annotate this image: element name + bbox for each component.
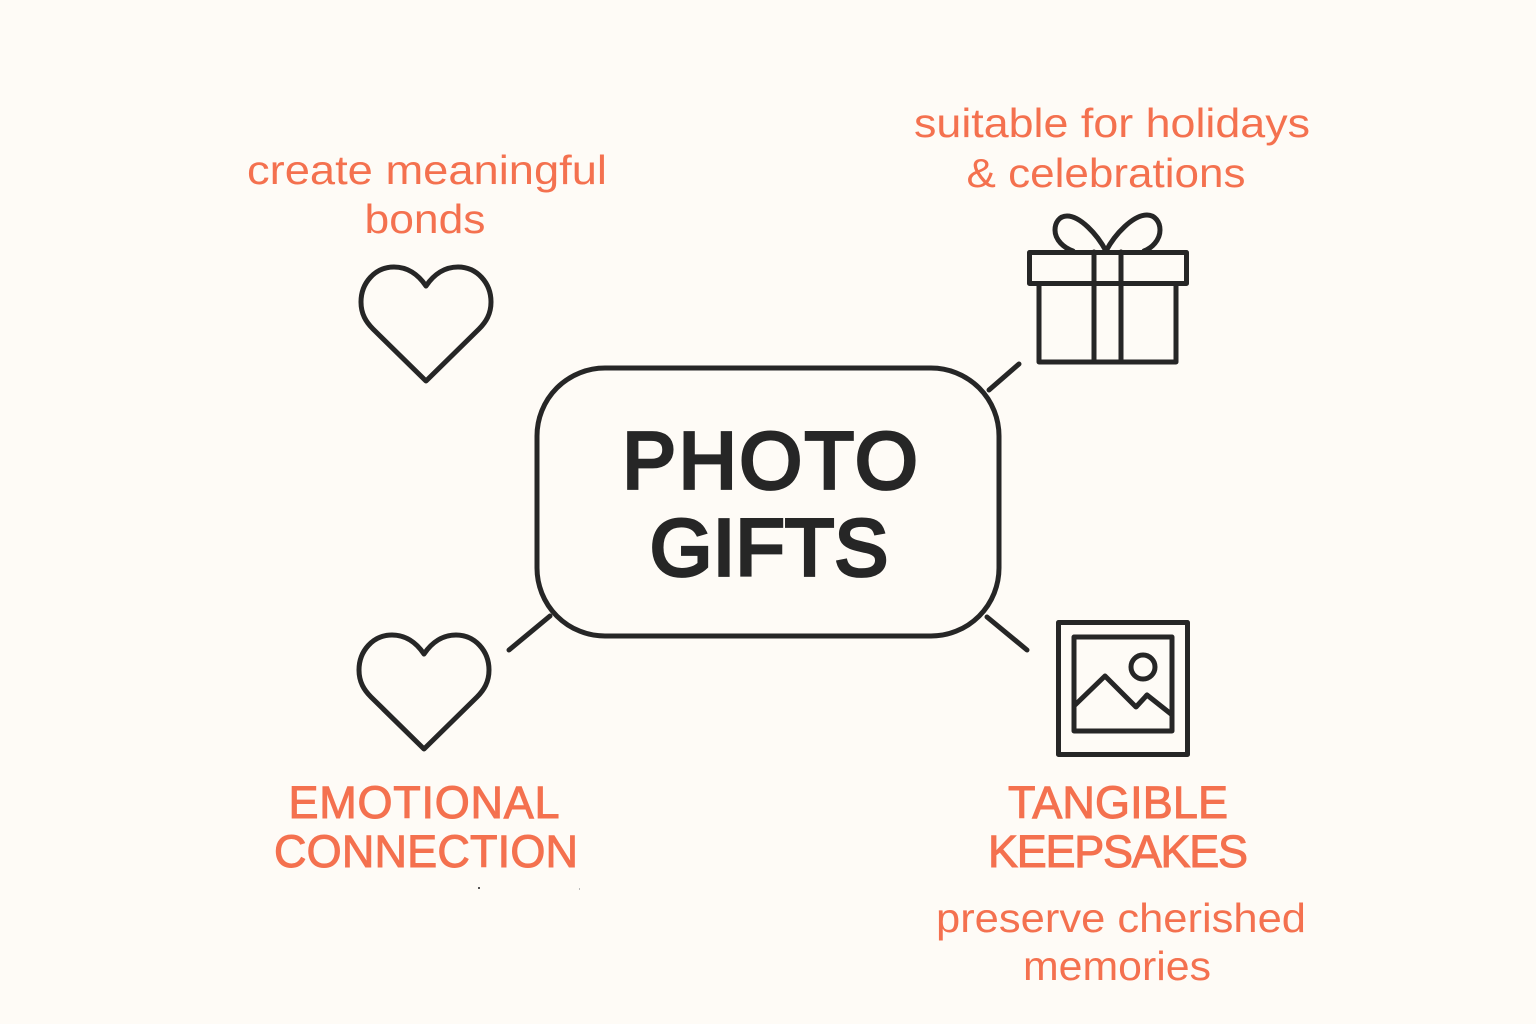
central box: photo gifts <box>537 368 999 636</box>
connector: to emotional heart <box>509 616 550 650</box>
connector: to photo frame <box>987 617 1027 650</box>
icon: gift box <box>1030 215 1186 362</box>
text: create meaningful bonds: create meaningful <box>247 147 607 193</box>
central box: photo gifts: GIFTS <box>650 503 888 592</box>
text: suitable for holidays and celebrations: & celebrations <box>966 150 1246 196</box>
icon: framed photo <box>1058 622 1188 754</box>
central box: photo gifts: PHOTO <box>622 416 918 505</box>
heading: emotional connection: CONNECTION <box>274 826 578 877</box>
connector: to gift icon <box>989 364 1019 390</box>
text: suitable for holidays and celebrations: suitable for holidays <box>914 100 1310 146</box>
speck marks <box>478 887 580 890</box>
text: create meaningful bonds <box>247 147 607 242</box>
heading: tangible keepsakes: KEEPSAKES <box>988 826 1248 877</box>
heading: emotional connection <box>274 777 578 877</box>
heading: tangible keepsakes <box>988 777 1248 877</box>
text: preserve cherished memories: preserve cherished <box>936 895 1306 941</box>
text: suitable for holidays and celebrations <box>914 100 1310 196</box>
heading: emotional connection: EMOTIONAL <box>288 777 560 828</box>
text: create meaningful bonds: bonds <box>364 196 486 242</box>
text: preserve cherished memories <box>936 895 1306 989</box>
text: preserve cherished memories: memories <box>1023 943 1211 989</box>
icon: top heart <box>361 267 491 381</box>
heading: tangible keepsakes: TANGIBLE <box>1008 777 1228 828</box>
icon: lower heart <box>359 635 489 749</box>
